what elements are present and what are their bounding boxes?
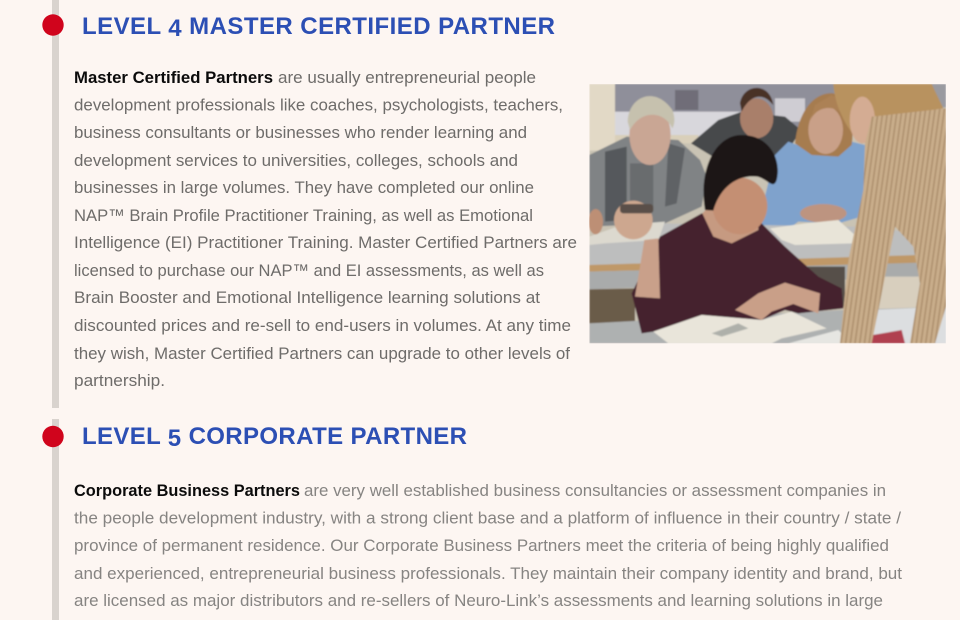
timeline: level 5 [42,419,64,620]
marker: level 4 dot [42,14,64,36]
text block: level 4 description: they wish, Master Certified Partners can upgrade to other levels of [74,344,570,363]
heading: level 4: LEVEL [82,13,161,40]
text block: level 4 description: licensed to purchase our NAP™ and EI assessments, as well as [74,261,544,280]
timeline: level 4 [42,0,64,408]
text block: level 4 description [74,68,577,390]
text block: level 4 description: businesses in large volumes. They have completed our online [74,178,534,197]
text block: level 4 description: development professionals like coaches, psychologists, teachers, [74,96,563,114]
text block: level 5 description: are licensed as major distributors and re-sellers of Neuro-Link’s assessments and learning solutions in large [74,591,883,610]
text block: level 5 description: Corporate Business Partners [74,481,300,500]
text block: level 4 description: business consultants or businesses who render learning and [74,123,527,142]
heading: level 5: 5 [168,425,181,452]
text block: level 4 description: Master Certified Partners [74,68,273,87]
heading: level 5: CORPORATE PARTNER [182,423,467,450]
heading: level 4: 4 [168,15,182,42]
heading: level 5: LEVEL [82,423,160,450]
text block: level 4 description: NAP™ Brain Profile Practitioner Training, as well as Emotional [74,206,533,225]
text block: level 4 description: Brain Booster and Emotional Intelligence learning solutions at [74,288,540,307]
text block: level 4 description: partnership. [74,371,165,390]
text block: level 4 description: Intelligence (EI) Practitioner Training. Master Certified Partners are [74,233,577,252]
text block: level 5 description: the people development industry, with a strong client base and a platform of influence in their country / state / [74,508,901,528]
marker: level 5 dot [42,426,64,447]
text block: level 4 description: discounted prices and re-sell to end-users in volumes. At any time [74,316,571,335]
text block: level 4 description: are usually entrepreneurial people [278,68,536,87]
text block: level 4 description: development services to universities, colleges, schools and [74,151,518,170]
photo: adult learners studying in a classroom [588,84,946,343]
text block: level 5 description [74,481,902,610]
text block: level 5 description: and experienced, entrepreneurial business professionals. They maintain their company identity and brand, but [74,564,902,583]
text block: level 5 description: province of permanent residence. Our Corporate Business Partners meet the criteria of being highly qualified [74,536,889,555]
text block: level 5 description: are very well established business consultancies or assessment companies in [304,481,886,500]
heading: level 4: MASTER CERTIFIED PARTNER [182,13,555,40]
